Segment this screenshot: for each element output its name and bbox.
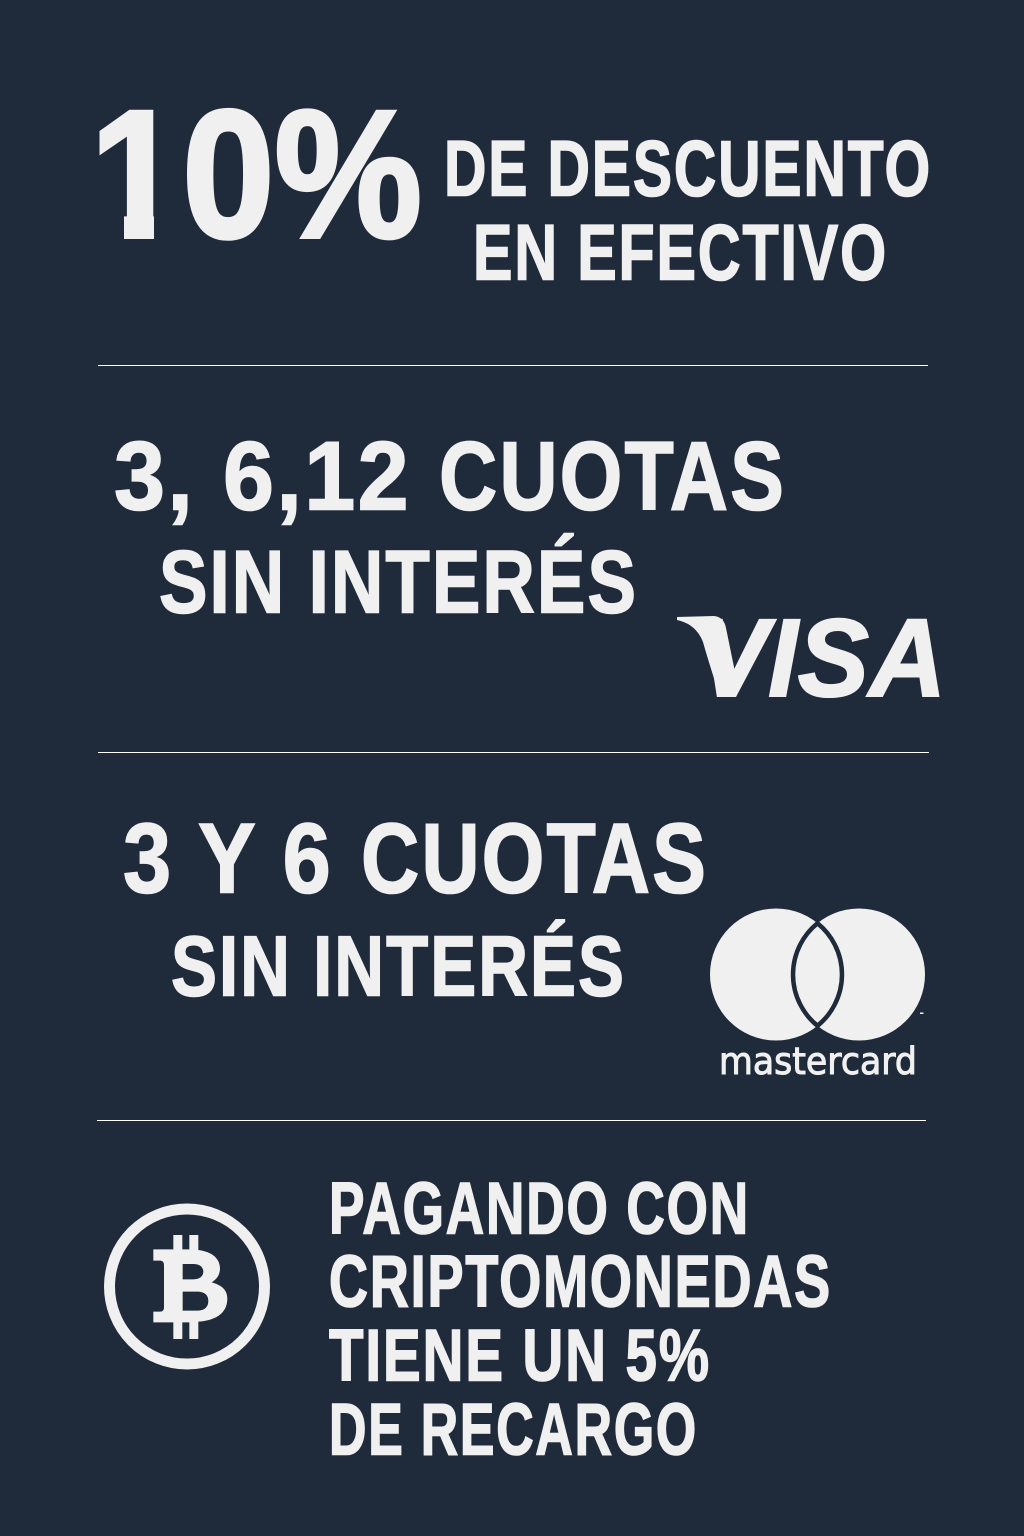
surcharge text line 3: TIENE UN 5% (329, 1316, 711, 1396)
surcharge text line 2: CRIPTOMONEDAS (329, 1242, 832, 1322)
visa installments heading (114, 422, 786, 530)
big percentage: 10% (90, 72, 422, 276)
mastercard interest-free text: SIN INTERÉS (171, 920, 626, 1014)
mastercard installments heading: 3 Y 6 (123, 802, 333, 914)
icon: mastercard logo (710, 908, 925, 1083)
surcharge text line 1: PAGANDO CON (329, 1168, 750, 1250)
visa interest-free text: SIN INTERÉS (159, 532, 638, 632)
icon: bitcoin (110, 1209, 264, 1364)
panel: crypto surcharge (110, 1168, 832, 1470)
icon: mastercard logo: mastercard (719, 1040, 917, 1083)
mastercard installments heading: CUOTAS (361, 802, 708, 914)
panel: visa installments (114, 422, 946, 720)
panel: cash discount (88, 72, 932, 296)
discount heading line 2: EN EFECTIVO (473, 208, 888, 296)
visa installments heading: 3, 6,12 (114, 422, 411, 530)
panel: mastercard installments (123, 802, 925, 1083)
visa installments heading: CUOTAS (439, 422, 786, 530)
surcharge text line 4: DE RECARGO (329, 1390, 698, 1470)
mastercard installments heading (123, 802, 708, 914)
icon: visa logo: VISA (697, 597, 946, 720)
